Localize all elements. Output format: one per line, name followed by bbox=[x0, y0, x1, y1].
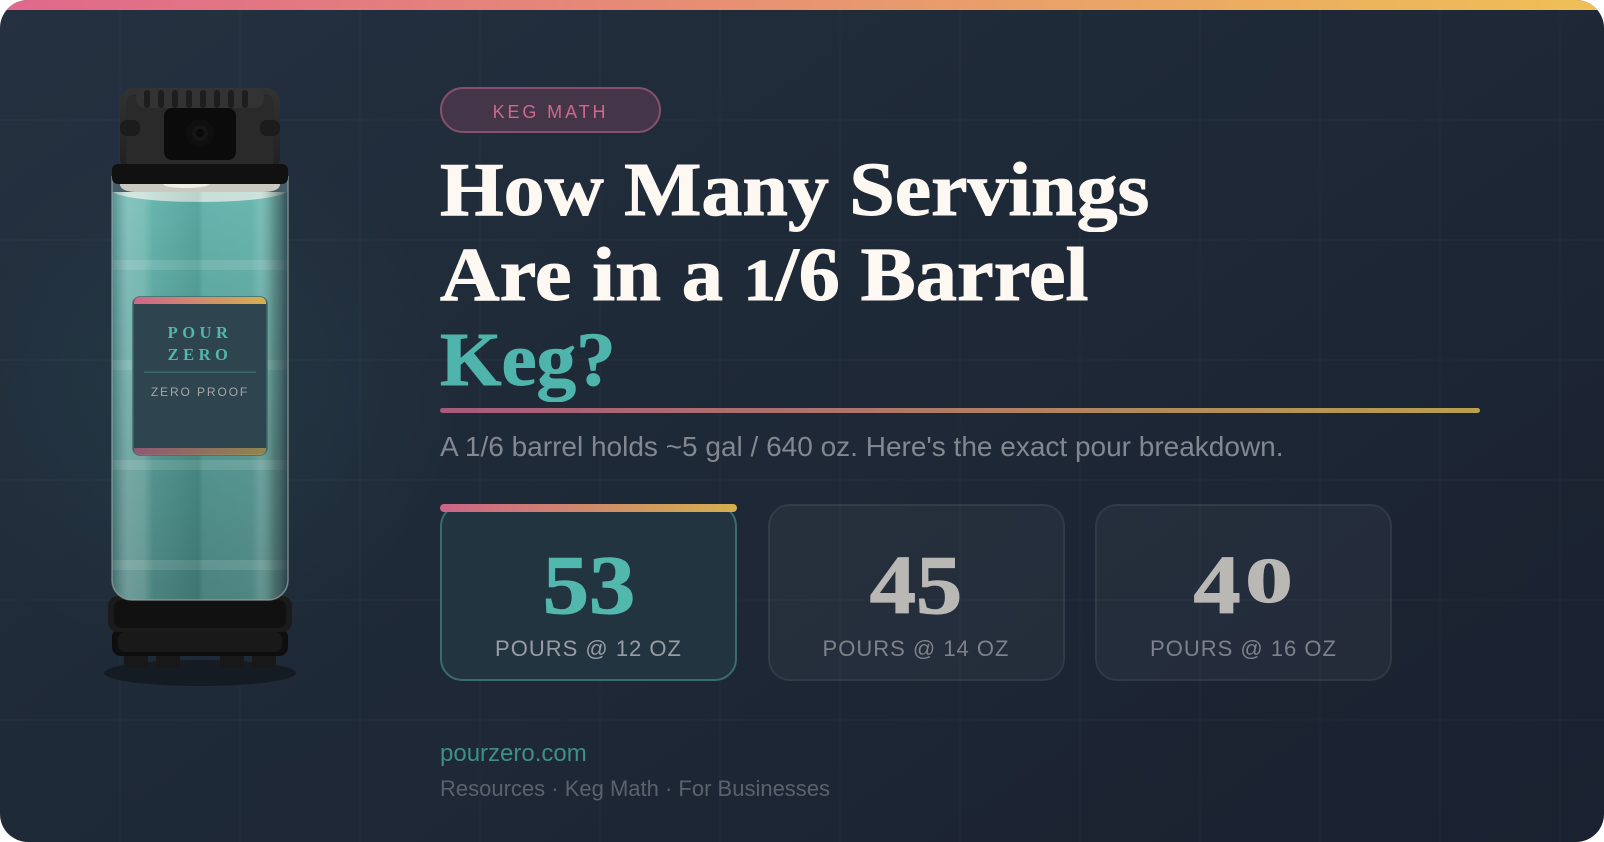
stat card: 40 pours at 16 oz: POURS @ 16 OZ bbox=[1150, 636, 1337, 661]
stat card: 53 pours at 12 oz bbox=[440, 504, 737, 681]
keg label: ZERO bbox=[168, 345, 232, 364]
stat card: 53 pours at 12 oz: POURS @ 12 OZ bbox=[495, 636, 682, 661]
tag pill: keg math: KEG MATH bbox=[493, 102, 608, 122]
icon: floor shadow bbox=[104, 660, 296, 686]
stat card: 45 pours at 14 oz: POURS @ 14 OZ bbox=[823, 636, 1009, 661]
tag pill: keg math bbox=[440, 87, 661, 133]
keg label: POUR bbox=[168, 323, 232, 342]
keg label: ZERO PROOF bbox=[151, 385, 249, 399]
subtitle: A 1/6 barrel holds ~5 gal / 640 oz. Here's the exact pour breakdown. bbox=[440, 430, 1284, 462]
keg base bbox=[108, 596, 292, 668]
stat card: 40 pours at 16 oz: 0 bbox=[1245, 546, 1293, 616]
card accent bar bbox=[440, 504, 737, 512]
top gradient bar bbox=[0, 0, 1604, 10]
gradient underline bbox=[440, 408, 1480, 413]
stat card: 53 pours at 12 oz: 53 bbox=[542, 539, 635, 632]
stat card: 45 pours at 14 oz bbox=[768, 504, 1064, 681]
footer url: pourzero.com bbox=[440, 740, 587, 767]
stat card: 40 pours at 16 oz: 4 bbox=[1193, 539, 1241, 632]
stat card: 45 pours at 14 oz: 45 bbox=[870, 539, 962, 632]
footer links: Resources · Keg Math · For Businesses bbox=[440, 776, 830, 801]
keg label bbox=[133, 297, 267, 455]
keg body bbox=[112, 176, 288, 600]
stat card: 40 pours at 16 oz bbox=[1095, 504, 1392, 681]
title line 3: accent: Keg? bbox=[440, 318, 616, 402]
title line 1: How Many Servings bbox=[440, 148, 1149, 232]
keg coupler cap bbox=[112, 88, 288, 184]
title line 2: Are in a 1/6 Barrel bbox=[440, 233, 1089, 317]
keg illustration bbox=[104, 88, 296, 686]
